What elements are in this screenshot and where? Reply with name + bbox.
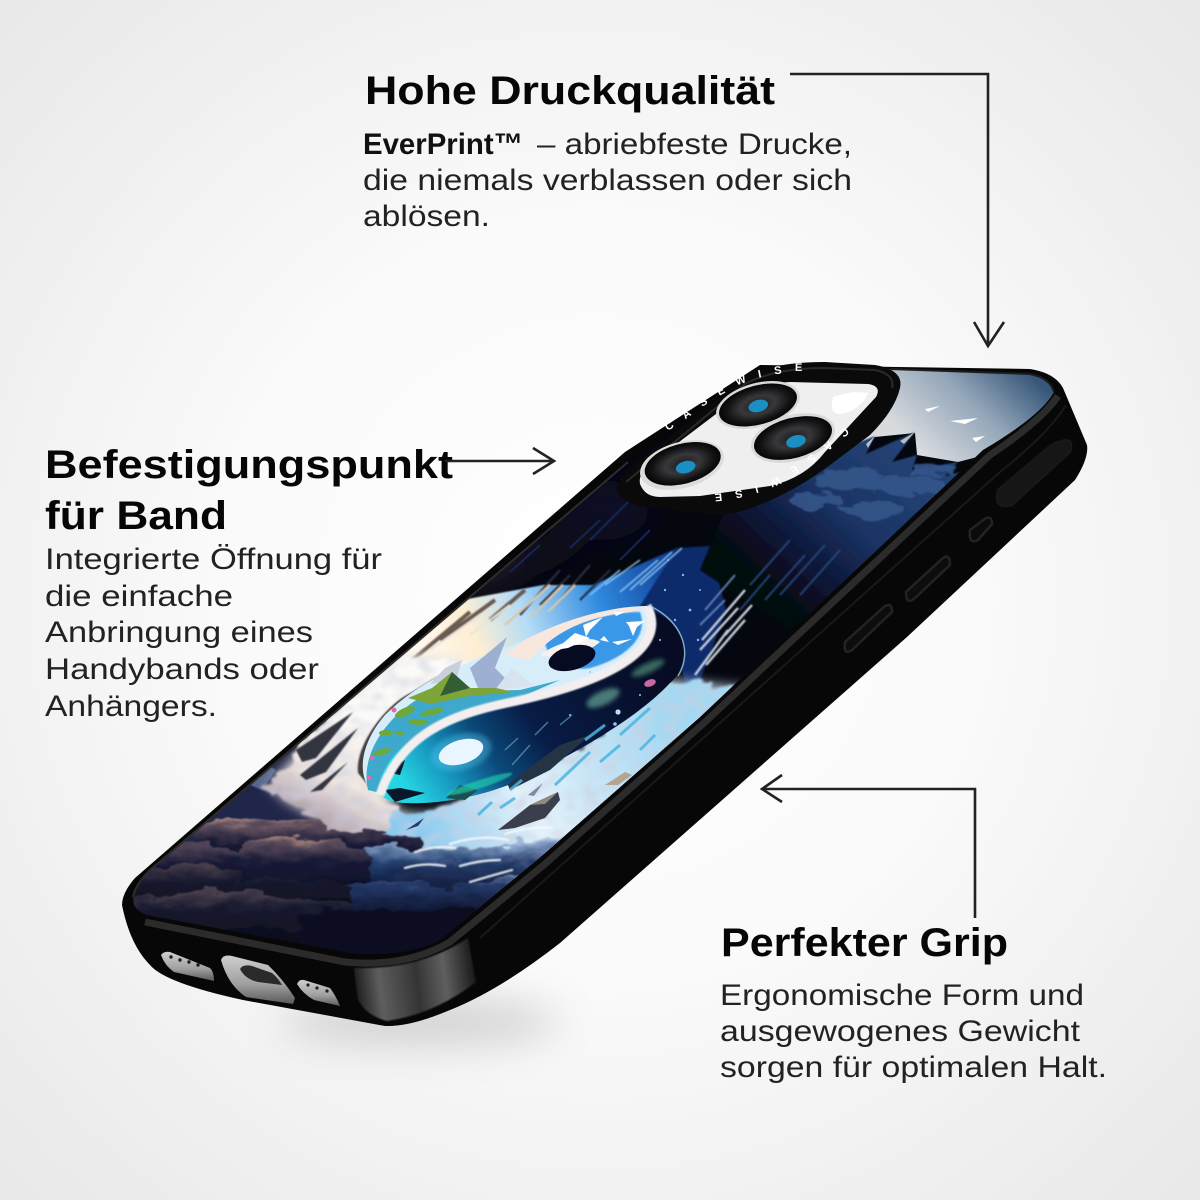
left rim highlight <box>133 462 628 897</box>
top rim highlight <box>890 369 1054 392</box>
heading: print quality: Hohe Druckqualität <box>365 69 775 113</box>
mountains <box>470 637 507 688</box>
nebula colours <box>584 684 622 712</box>
white cloud crests <box>405 828 552 882</box>
text block: strap attachment: Handybands oder <box>45 653 319 686</box>
cloud rim shadow <box>358 675 440 790</box>
arrow: grip <box>762 775 975 918</box>
ice shards <box>478 708 655 815</box>
pale blue cloud bank <box>388 680 760 858</box>
cyan rim <box>650 606 685 676</box>
grassy land <box>408 672 514 704</box>
lower sky base <box>133 712 706 905</box>
faint streaks in dark region <box>510 500 650 572</box>
side seam <box>145 396 1058 963</box>
text block: strap attachment: die einfache <box>45 580 233 613</box>
heading: strap attachment: für Band <box>45 494 227 538</box>
yang eye <box>548 644 596 672</box>
deep blue starfield <box>640 545 726 684</box>
ridge streaks <box>695 540 840 675</box>
charging port <box>221 956 295 1004</box>
navy cloud lobe <box>208 746 310 822</box>
text block: print quality: EverPrint™ <box>363 128 523 161</box>
text block: strap attachment: Anhängers. <box>45 690 217 723</box>
heading: grip: Perfekter Grip <box>721 921 1008 965</box>
lens left <box>635 432 729 498</box>
brand ring lettering: CASEWISE <box>666 363 802 430</box>
floating rocks <box>406 772 632 830</box>
callout: print quality <box>363 69 852 233</box>
peach cloud crest <box>505 606 647 660</box>
heading: strap attachment <box>45 443 453 538</box>
dark region above the symbol <box>457 480 650 605</box>
text block: grip: sorgen für optimalen Halt. <box>720 1051 1107 1084</box>
text block: print quality: ablösen. <box>363 200 490 233</box>
left speaker <box>161 952 214 981</box>
bump bevel <box>626 368 892 482</box>
dusk clouds left <box>133 816 425 934</box>
text block: strap attachment: Anbringung eines <box>45 616 313 649</box>
lens top <box>711 373 805 437</box>
soft underlayer for white clouds <box>270 655 470 835</box>
birds <box>555 406 985 650</box>
text block: grip <box>720 979 1107 1084</box>
sky streaks <box>410 548 682 662</box>
text block: print quality: – abriebfeste Drucke, <box>537 128 852 161</box>
text block: strap attachment <box>45 543 382 723</box>
clouded mountains and sky <box>858 369 1054 462</box>
yin yang symbol <box>358 606 686 803</box>
deep blue sky patch <box>545 612 642 669</box>
dark tower spires <box>296 712 358 792</box>
blue clouds right <box>300 834 575 960</box>
thin streaks in dark half <box>505 715 572 765</box>
side buttons <box>845 440 1071 652</box>
brand ring lettering: CASEWISE <box>714 428 848 502</box>
soft underlayer for blue clouds <box>392 680 760 860</box>
text block: print quality <box>363 128 852 233</box>
callout: grip <box>720 921 1107 1084</box>
phone with yin yang case <box>122 362 1088 1026</box>
light half <box>363 606 652 795</box>
lens right <box>746 405 840 471</box>
phone shadow <box>280 998 560 1046</box>
sun-lit sky <box>330 548 677 730</box>
text block: grip: Ergonomische Form und <box>720 979 1084 1012</box>
brand ring lettering <box>666 363 848 502</box>
yin eye <box>430 731 494 772</box>
arrow: strap attachment <box>445 448 554 474</box>
dark half <box>379 608 686 803</box>
camera bump <box>617 362 900 514</box>
camera glass window <box>640 382 878 497</box>
bottom ports <box>161 952 340 1006</box>
text block: print quality: die niemals verblassen oder sich <box>363 164 852 197</box>
right speaker <box>297 980 340 1006</box>
callout: strap attachment <box>45 443 453 723</box>
white swoosh <box>380 606 652 795</box>
printed artwork <box>133 369 1054 954</box>
arrow: print quality <box>790 74 1004 346</box>
blue cloud texture <box>787 464 957 517</box>
glossy lower corner <box>354 938 476 1021</box>
heading: strap attachment: Befestigungspunkt <box>45 443 453 487</box>
white cumulus bank <box>262 655 470 838</box>
sea <box>367 680 560 793</box>
stars <box>664 559 701 641</box>
islands in dark half <box>508 735 590 790</box>
text block: grip: ausgewogenes Gewicht <box>720 1015 1081 1048</box>
case body <box>122 365 1087 1026</box>
text block: strap attachment: Integrierte Öffnung für <box>45 543 382 576</box>
